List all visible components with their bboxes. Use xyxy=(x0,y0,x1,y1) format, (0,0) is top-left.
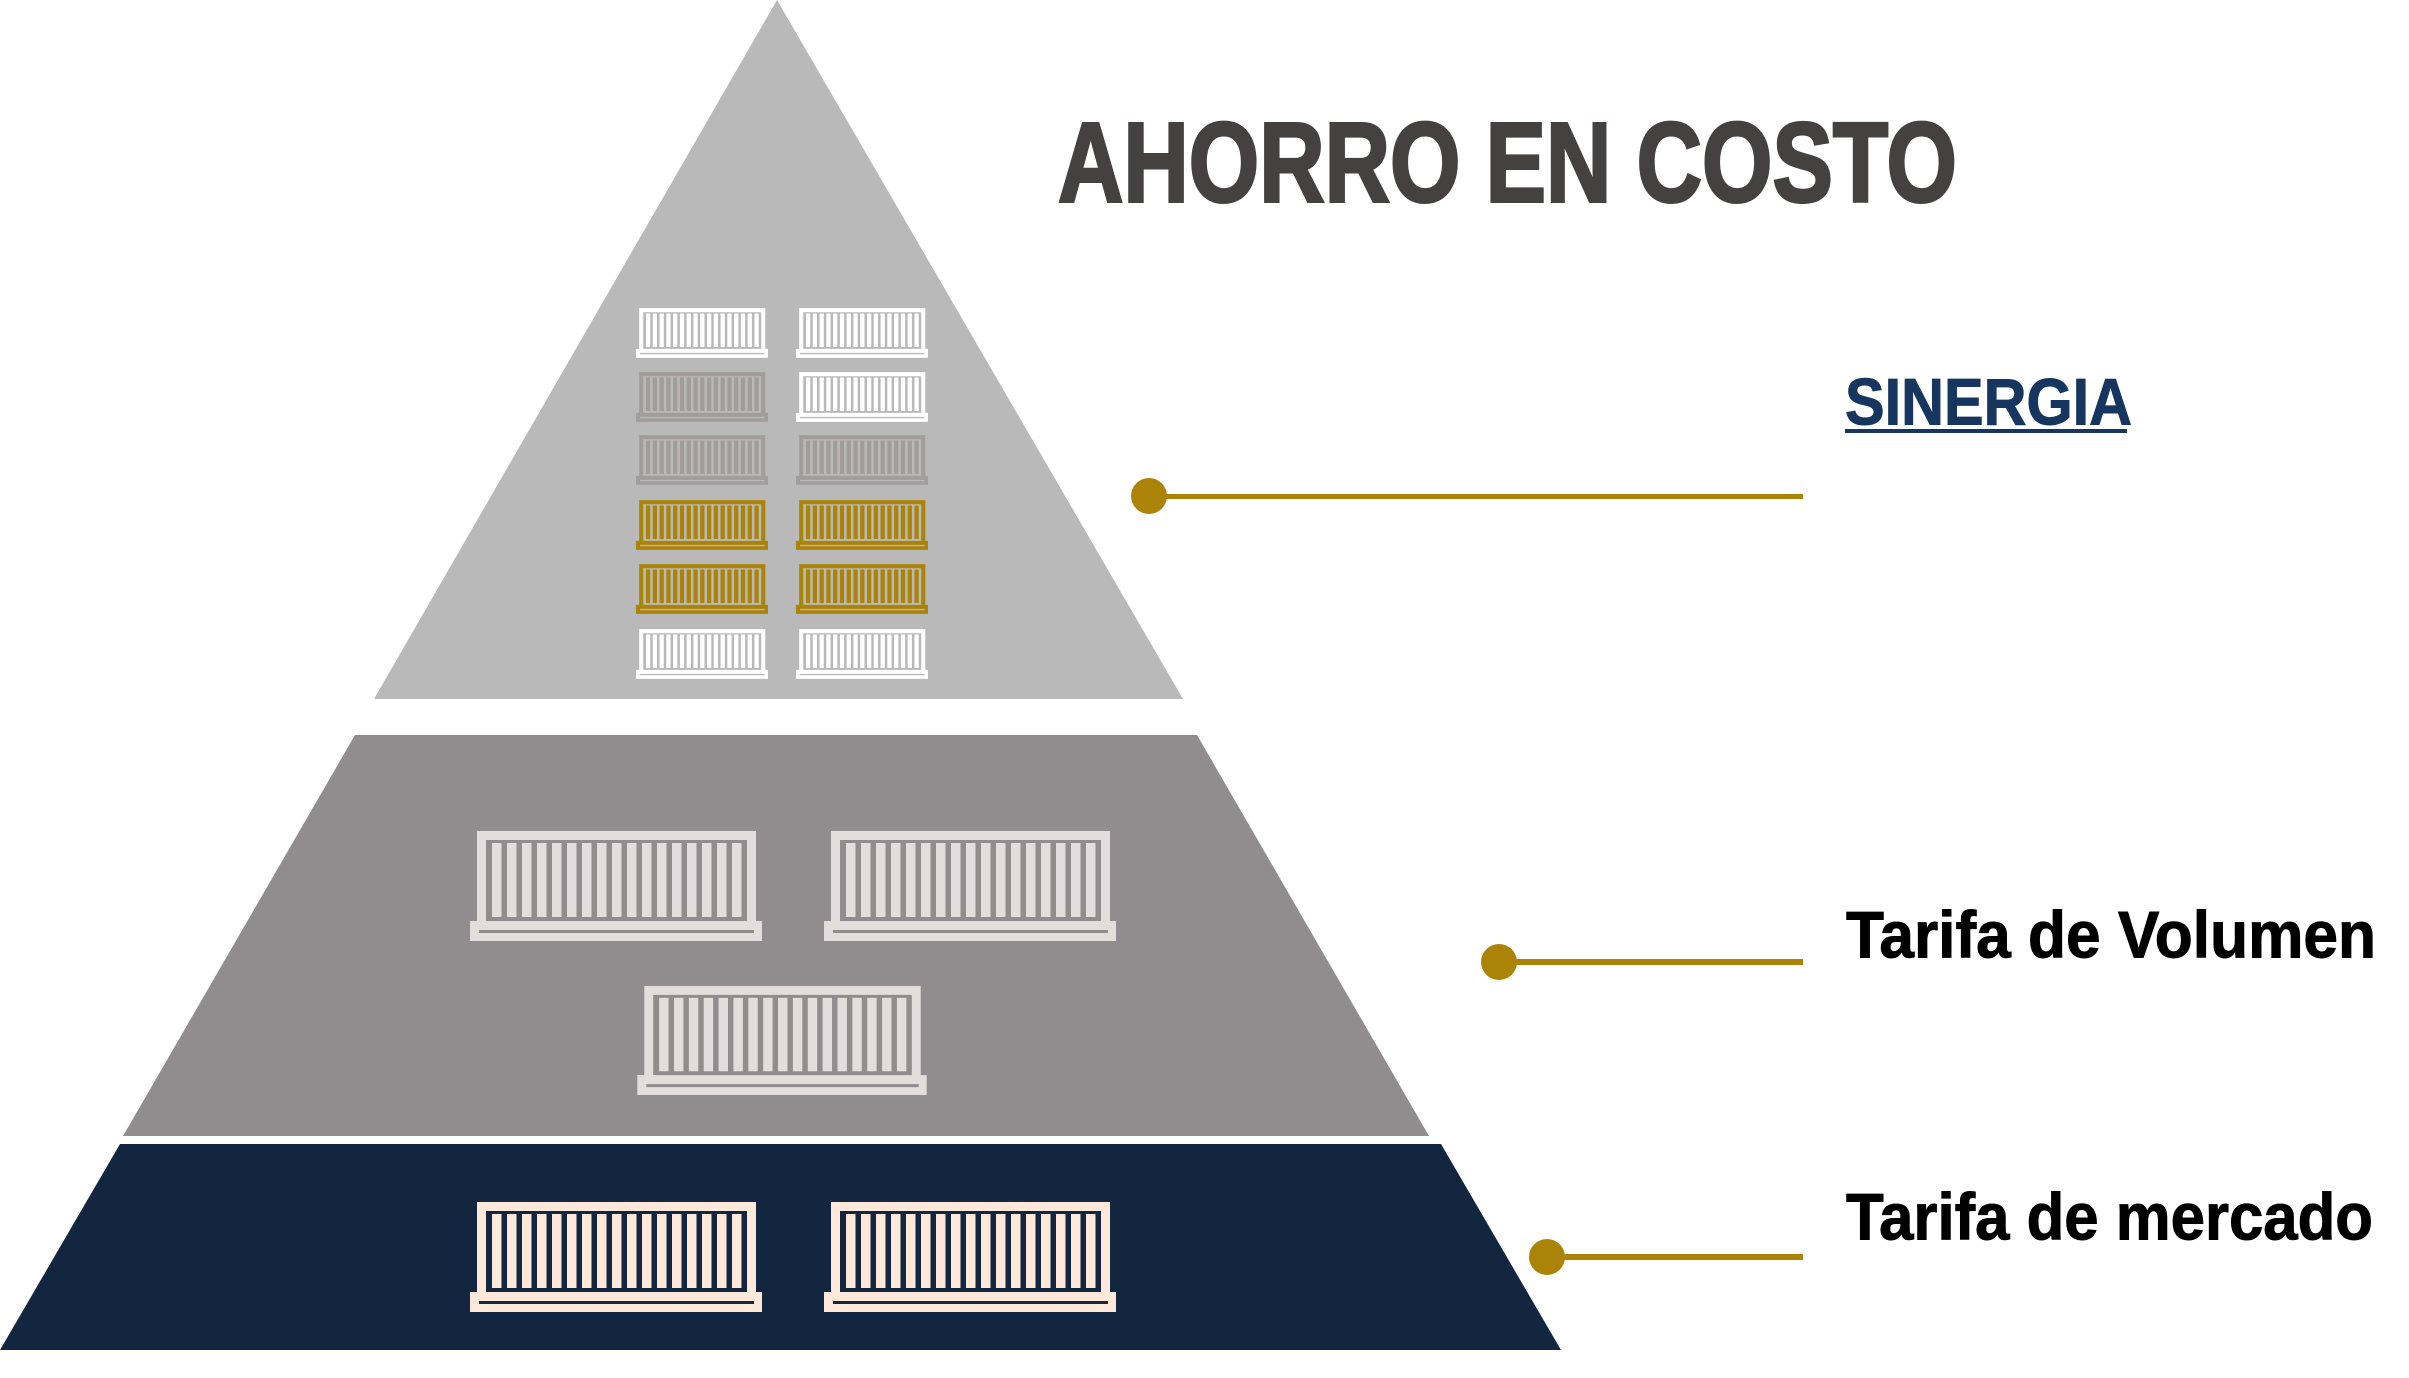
label: tarifa de mercado: Tarifa de mercado xyxy=(1846,1180,2373,1254)
containers: two cream xyxy=(470,1202,1116,1312)
label: tarifa de volumen: Tarifa de Volumen xyxy=(1846,898,2376,972)
containers: three light grey xyxy=(470,831,1116,1095)
panel: middle tier tarifa de volumen xyxy=(123,735,1429,1136)
connector: tarifa de volumen xyxy=(1481,944,1803,980)
title: AHORRO EN COSTO xyxy=(1058,100,1957,226)
top tier triangle xyxy=(374,0,1183,699)
connector: sinergia xyxy=(1131,478,1803,514)
panel: bottom tier tarifa de mercado xyxy=(0,1144,1561,1350)
connector: tarifa de mercado xyxy=(1529,1239,1803,1275)
panel: top tier sinergia xyxy=(374,0,1183,699)
label: sinergia: SINERGIA xyxy=(1845,364,2132,438)
middle tier trapezoid xyxy=(123,735,1429,1136)
bottom tier trapezoid xyxy=(0,1144,1561,1350)
container grid: twelve small containers xyxy=(636,308,928,679)
